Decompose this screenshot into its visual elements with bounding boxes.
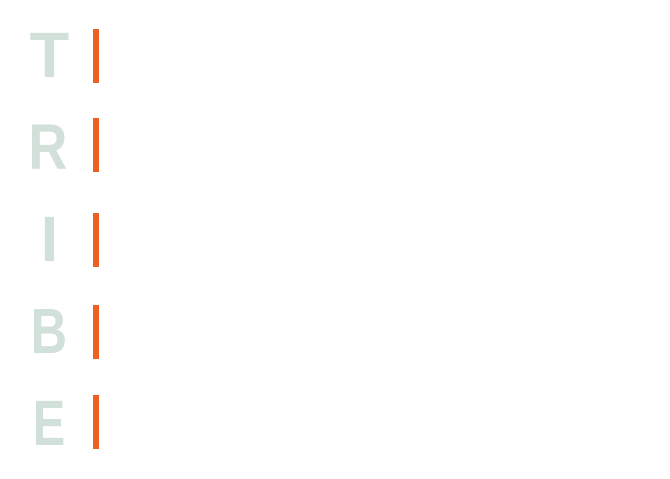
row R: letter and orange divider: R	[28, 111, 67, 183]
row I: letter and orange divider: I	[41, 203, 58, 275]
row B: letter and orange divider: B	[31, 295, 67, 367]
row T: letter and orange divider	[30, 19, 99, 91]
row B: letter and orange divider	[31, 295, 99, 367]
row E: letter and orange divider	[33, 387, 99, 459]
row E: letter and orange divider: E	[33, 387, 65, 459]
row T: letter and orange divider: T	[30, 19, 69, 91]
row I: letter and orange divider	[41, 203, 99, 275]
row R: letter and orange divider	[28, 111, 99, 183]
